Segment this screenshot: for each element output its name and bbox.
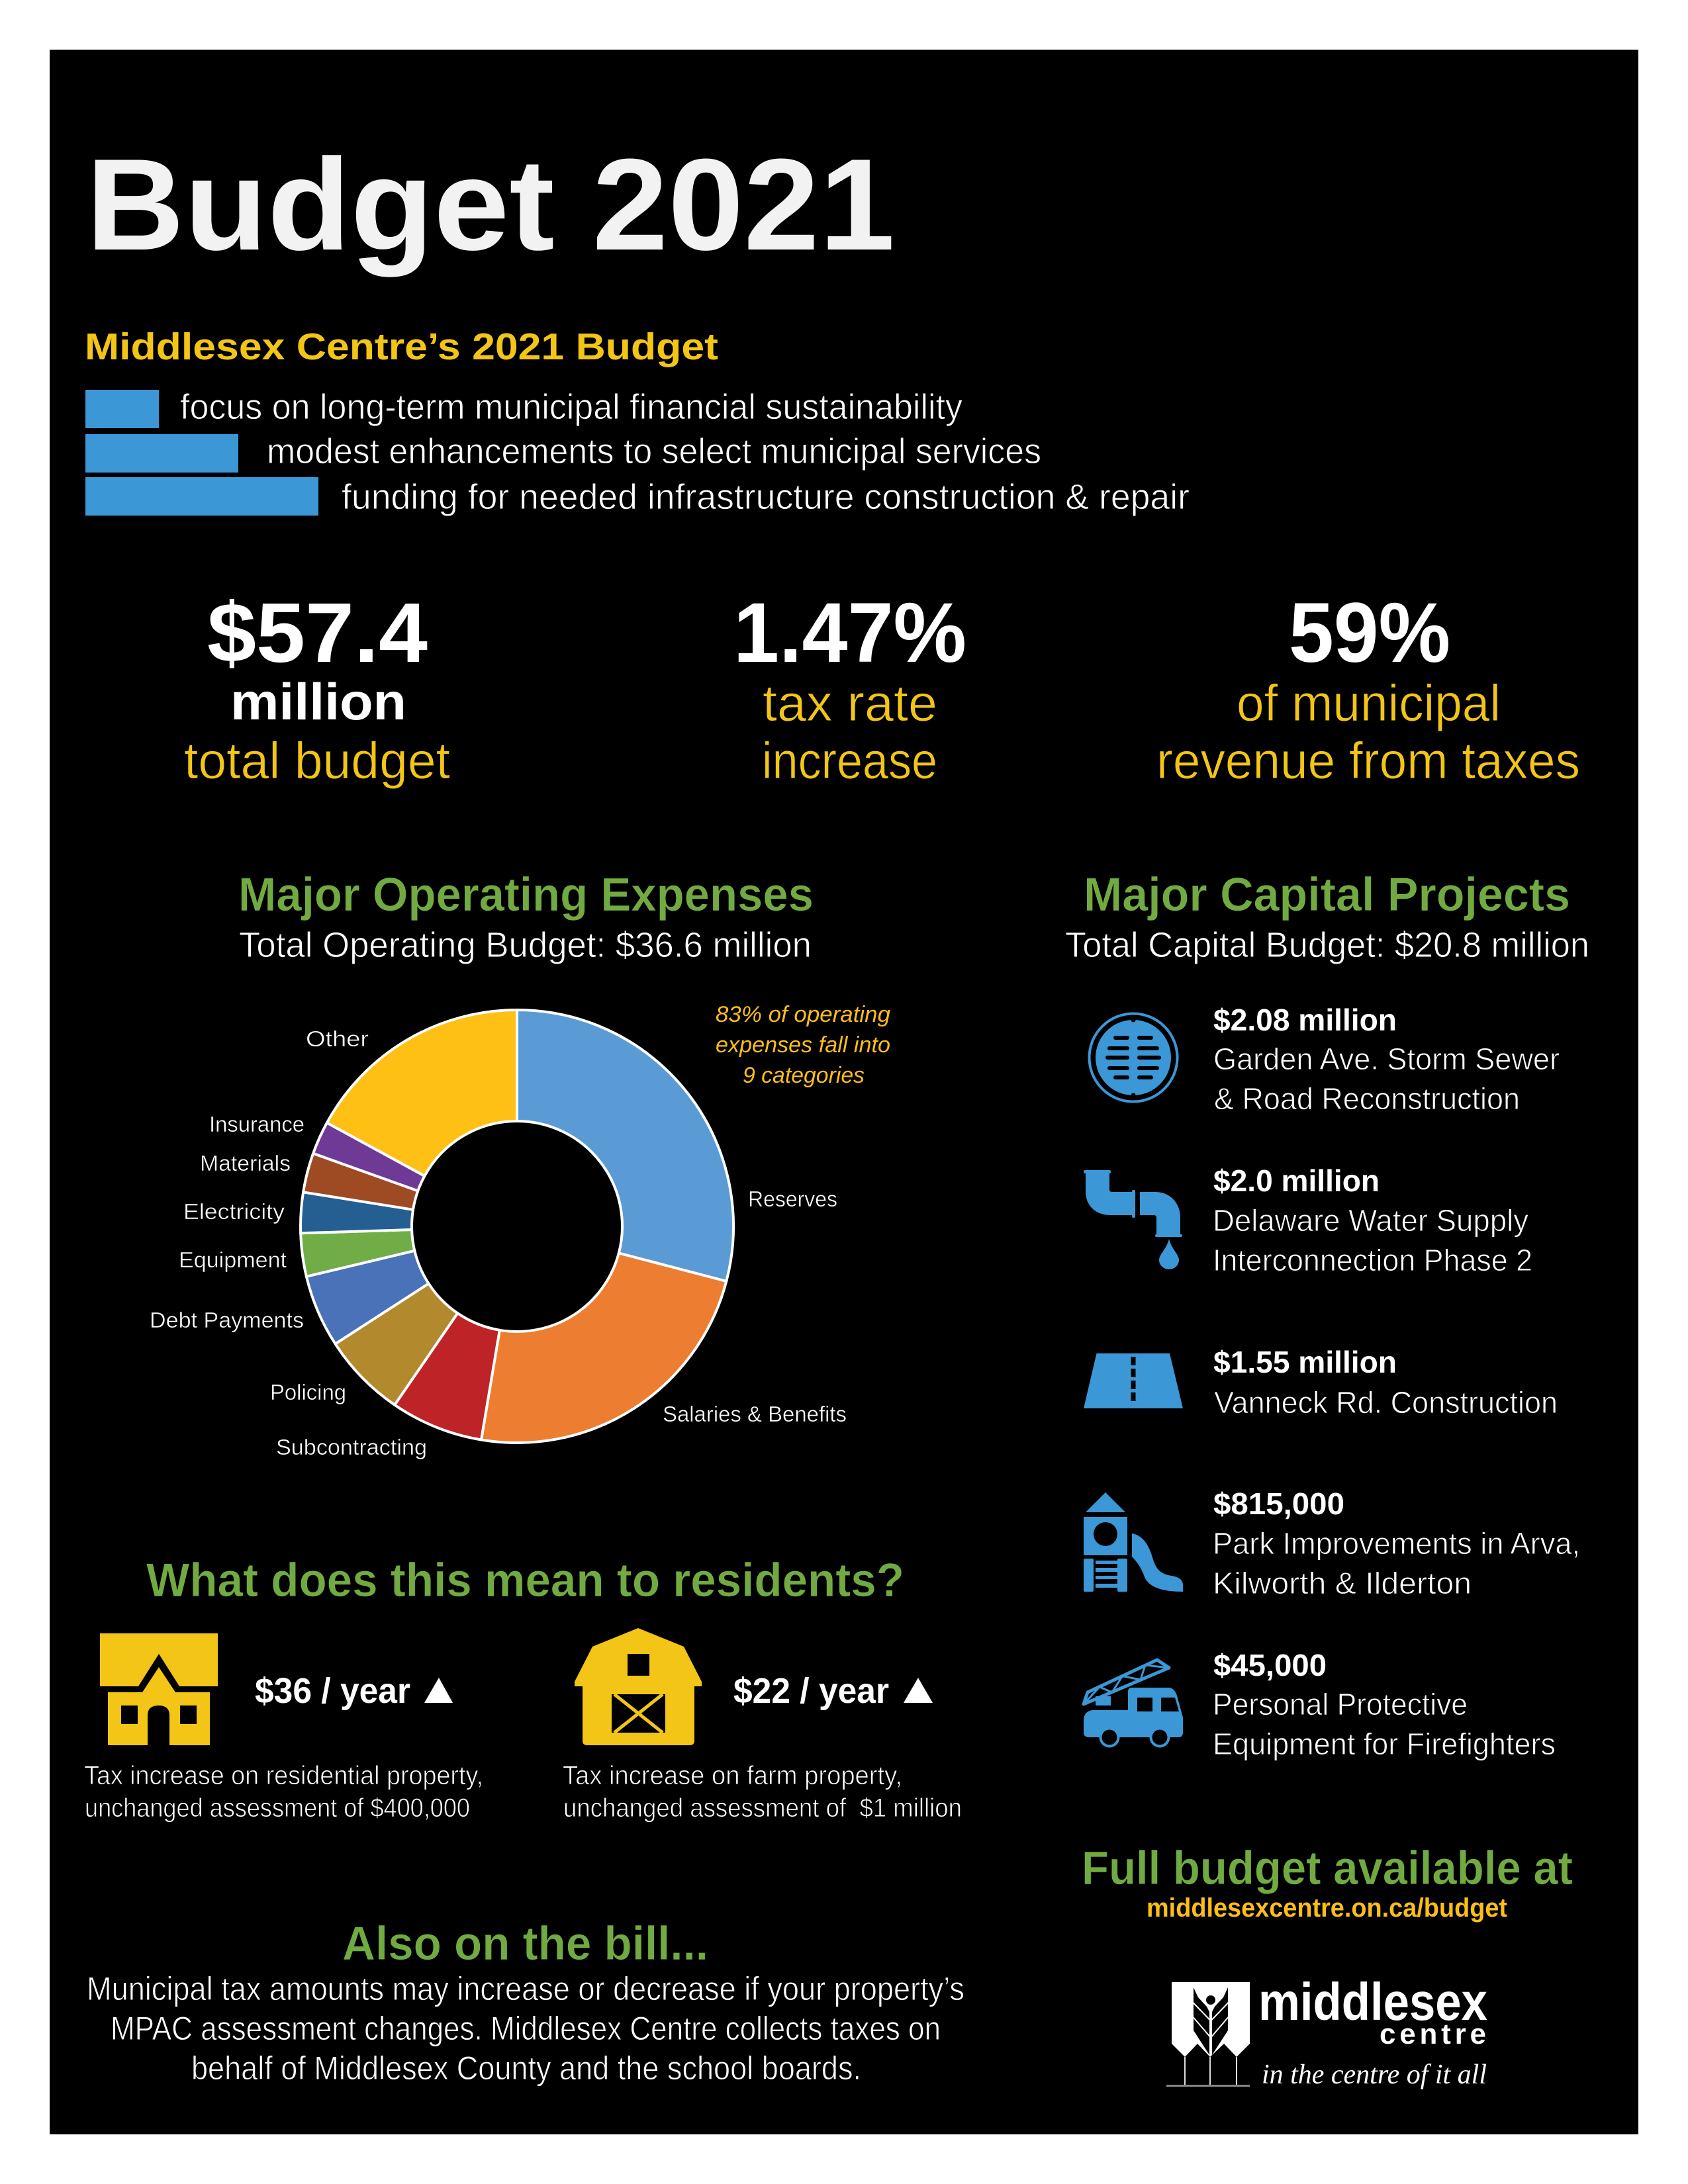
project: vanneck road: Vanneck Rd. Construction: [1214, 1385, 1558, 1420]
stat: tax rate increase: increase: [762, 731, 937, 790]
also on the bill: Municipal tax amounts may increase or decrease if your property’s: [87, 1970, 964, 2007]
chart labels: Policing: [270, 1380, 346, 1404]
priority text 3: funding for needed infrastructure construction & repair: [342, 477, 1190, 517]
chart labels: Debt Payments: [150, 1308, 304, 1332]
priority bar 1: [85, 390, 159, 428]
farm caption: Tax increase on farm property,: [563, 1761, 902, 1790]
callout: 83 percent: 83% of operating: [716, 1002, 890, 1027]
also on the bill: Also on the bill...: [342, 1918, 708, 1970]
project: garden ave: $2.08 million: [1213, 1003, 1397, 1037]
logo: middlesex centre: in the centre of it all: [1262, 2060, 1487, 2090]
farm caption: [563, 1761, 962, 1823]
chart labels: Other: [306, 1026, 369, 1051]
full budget link: [1082, 1843, 1573, 1923]
stat: tax rate increase: tax rate: [763, 674, 937, 732]
icon: playground: [1084, 1492, 1183, 1592]
full budget link: Full budget available at: [1082, 1843, 1573, 1895]
heading: what does this mean: What does this mean to residents?: [146, 1555, 904, 1607]
callout: 83 percent: expenses fall into: [716, 1032, 890, 1058]
logo: middlesex centre: centre: [1380, 2018, 1486, 2050]
chart labels: Salaries & Benefits: [663, 1402, 847, 1426]
residential caption: unchanged assessment of $400,000: [85, 1794, 470, 1823]
full budget link: middlesexcentre.on.ca/budget: [1147, 1893, 1507, 1923]
chart labels: Reserves: [748, 1187, 837, 1211]
priority text 2: modest enhancements to select municipal services: [267, 432, 1041, 471]
logo: middlesex centre: [1166, 1972, 1487, 2090]
stat: revenue from taxes: revenue from taxes: [1156, 731, 1580, 790]
project: garden ave: [1213, 1003, 1560, 1116]
logo: middlesex centre: middlesex: [1258, 1972, 1487, 2031]
project: protective equipment: [1213, 1648, 1556, 1761]
chart labels: Equipment: [179, 1248, 287, 1272]
stat: tax rate increase: [733, 586, 966, 790]
heading: major capital projects: Total Capital Budget: $20.8 million: [1065, 925, 1589, 965]
icon: road: [1084, 1353, 1183, 1408]
icon: water pipe: [1084, 1170, 1182, 1269]
icon: barn: [575, 1628, 702, 1745]
project: protective equipment: Personal Protective: [1213, 1687, 1468, 1721]
project: delaware water: [1213, 1163, 1532, 1277]
callout: 83 percent: [716, 1002, 890, 1088]
icon: house: [100, 1633, 218, 1745]
project: delaware water: Interconnection Phase 2: [1213, 1243, 1532, 1277]
also on the bill: behalf of Middlesex County and the school boards.: [191, 2050, 861, 2087]
residential caption: [84, 1761, 483, 1823]
icon: storm sewer: [1090, 1014, 1177, 1101]
stat: revenue from taxes: [1156, 586, 1580, 790]
chart labels: [150, 1026, 847, 1459]
project: garden ave: & Road Reconstruction: [1214, 1081, 1520, 1116]
callout: 83 percent: 9 categories: [743, 1063, 865, 1088]
subtitle: Middlesex Centre’s 2021 Budget: [85, 326, 718, 368]
project: delaware water: Delaware Water Supply: [1213, 1203, 1528, 1238]
panel: budget priorities: [85, 326, 1190, 517]
stat: revenue from taxes: of municipal: [1237, 674, 1501, 732]
also on the bill: [87, 1918, 964, 2087]
stat: tax rate increase: 1.47%: [733, 586, 966, 680]
heading: major capital projects: [1065, 869, 1589, 965]
project: protective equipment: Equipment for Firefighters: [1213, 1727, 1556, 1761]
project: park improvements: Kilworth & Ilderton: [1213, 1566, 1472, 1600]
stat: total budget: $57.4: [207, 586, 428, 680]
farm caption: unchanged assessment of $1 million: [563, 1794, 962, 1823]
project: vanneck road: [1213, 1345, 1558, 1420]
stat: total budget: [184, 586, 450, 790]
chart labels: Materials: [200, 1151, 291, 1175]
heading: major operating expenses: Total Operating Budget: $36.6 million: [239, 925, 812, 965]
residential increase: $36 / year: [255, 1671, 410, 1711]
stat: total budget: million: [230, 672, 406, 731]
heading: major operating expenses: [238, 869, 814, 965]
heading: major capital projects: Major Capital Projects: [1084, 869, 1570, 921]
stat: total budget: total budget: [184, 731, 450, 790]
project: delaware water: $2.0 million: [1213, 1163, 1380, 1198]
project: park improvements: Park Improvements in Arva,: [1213, 1526, 1580, 1561]
chart labels: Electricity: [183, 1199, 285, 1224]
priority bar 3: [85, 477, 318, 516]
project: vanneck road: $1.55 million: [1213, 1345, 1397, 1379]
project: park improvements: [1213, 1486, 1580, 1600]
donut chart: operating expenses: [301, 1010, 733, 1443]
priority text 1: focus on long-term municipal financial sustainability: [180, 387, 962, 427]
farm increase: $22 / year: [733, 1671, 889, 1711]
project: garden ave: Garden Ave. Storm Sewer: [1213, 1042, 1560, 1076]
title: Budget 2021: [86, 132, 895, 277]
project: protective equipment: $45,000: [1213, 1648, 1327, 1682]
heading: major operating expenses: Major Operating Expenses: [238, 869, 814, 921]
chart labels: Insurance: [209, 1112, 305, 1136]
icon: fire truck: [1084, 1660, 1183, 1747]
chart labels: Subcontracting: [276, 1435, 427, 1459]
also on the bill: MPAC assessment changes. Middlesex Centre collects taxes on: [111, 2010, 941, 2047]
stat: revenue from taxes: 59%: [1289, 586, 1450, 680]
project: park improvements: $815,000: [1213, 1486, 1344, 1521]
residential caption: Tax increase on residential property,: [84, 1761, 483, 1790]
priority bar 2: [85, 434, 238, 473]
